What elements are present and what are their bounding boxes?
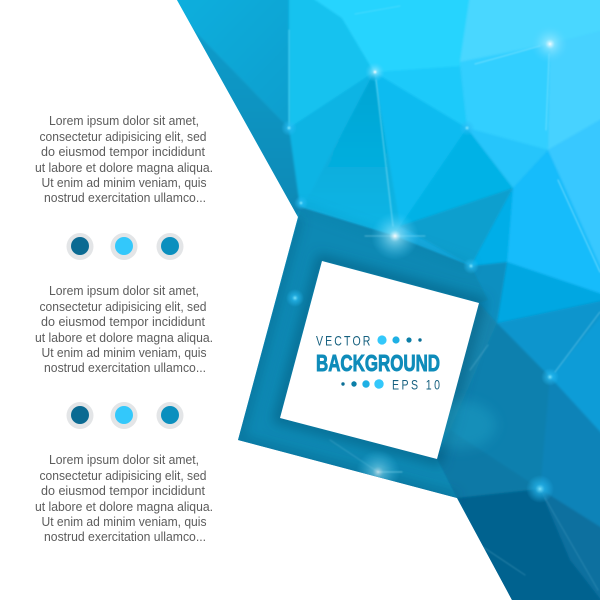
button dots row 2 [66,402,184,429]
dots row bottom [341,379,384,389]
glow lights [281,24,570,503]
panel: blue polygon background [160,0,600,600]
text block 2: consectetur adipisicing elit, sed [40,300,206,314]
BACKGROUND heading: BACKGROUND [316,350,440,376]
text block 3: do eiusmod tempor incididunt [41,484,205,498]
text block 1: ut labore et dolore magna aliqua. [35,161,213,175]
facets: upper polygon mesh [160,0,600,600]
facets: lower polygon mesh [497,262,600,323]
VECTOR label: VECTOR [316,333,370,349]
text block 3: nostrud exercitation ullamco... [44,530,206,544]
text block 1: Lorem ipsum dolor sit amet, [49,114,199,128]
text block 2: Lorem ipsum dolor sit amet, [49,284,199,298]
text block 1: do eiusmod tempor incididunt [41,145,205,159]
text block 1 [35,114,213,205]
EPS 10 label: EPS 10 [392,377,440,393]
button dots row 1 [66,233,184,260]
text block 2 [35,284,213,375]
dots row top [377,335,422,345]
text block 3: consectetur adipisicing elit, sed [40,469,206,483]
text block 2: ut labore et dolore magna aliqua. [35,331,213,345]
text block 3: Lorem ipsum dolor sit amet, [49,453,199,467]
text block 1: nostrud exercitation ullamco... [44,191,206,205]
text block 3: ut labore et dolore magna aliqua. [35,500,213,514]
text block 1: consectetur adipisicing elit, sed [40,130,206,144]
text block 2: Ut enim ad minim veniam, quis [42,346,206,360]
text block 2: do eiusmod tempor incididunt [41,315,205,329]
frame around the card [238,207,488,498]
light streaks [289,6,600,590]
text block 1: Ut enim ad minim veniam, quis [42,176,206,190]
text block 2: nostrud exercitation ullamco... [44,361,206,375]
card title block [316,333,440,393]
white card [280,261,479,459]
text block 3: Ut enim ad minim veniam, quis [42,515,206,529]
text block 3 [35,453,213,544]
